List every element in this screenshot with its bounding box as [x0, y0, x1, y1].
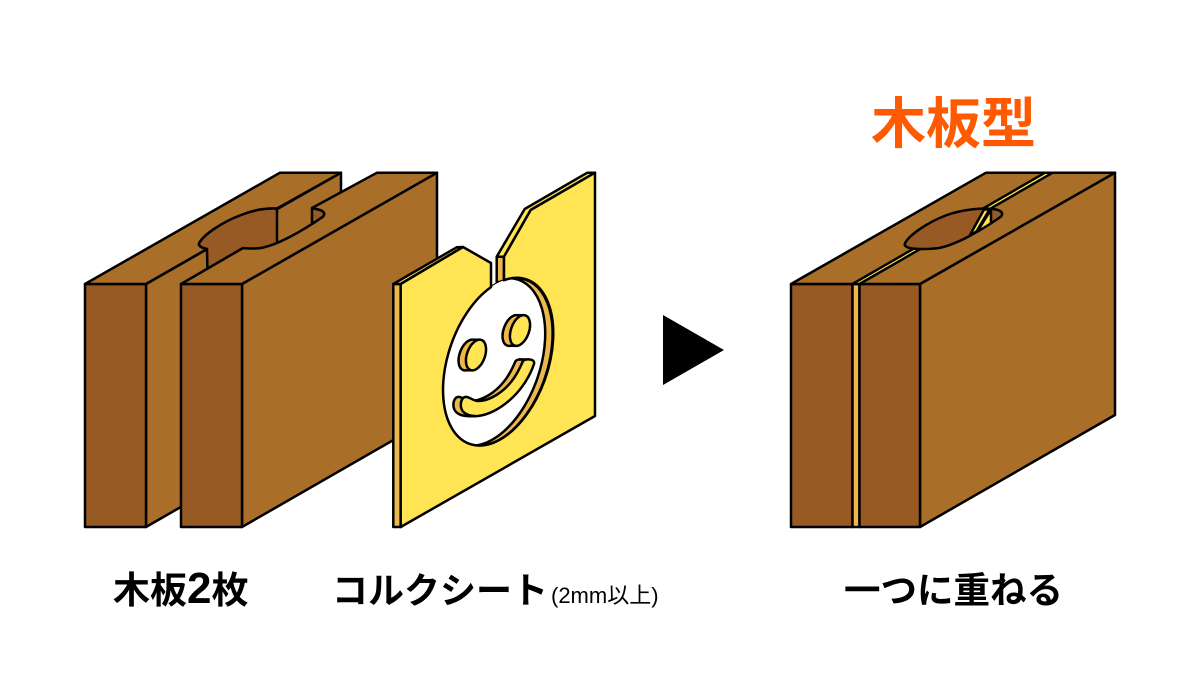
label: cork sheet	[332, 570, 659, 611]
title: 木板型	[871, 93, 1036, 155]
top cork line	[852, 173, 1053, 284]
right eye	[499, 312, 534, 349]
smile	[453, 359, 534, 416]
sheet front face	[401, 173, 595, 527]
front cork strip	[852, 284, 860, 527]
cork sheet with smiley cut-out	[393, 173, 595, 527]
face hole	[476, 279, 552, 444]
label: cork sheet: (2mm以上)	[551, 583, 659, 608]
right illustration: boards stacked with cork between	[791, 173, 1115, 527]
label: stack together: 一つに重ねる	[844, 570, 1063, 611]
left eye	[455, 337, 490, 373]
arrow	[663, 315, 724, 385]
hole	[905, 209, 1002, 249]
sheet edges	[393, 173, 595, 527]
front right board	[860, 284, 920, 527]
board 1	[85, 173, 341, 527]
front left board	[791, 284, 852, 527]
top face	[791, 173, 1115, 284]
side face	[920, 173, 1115, 527]
label: two boards: 木板2枚	[113, 564, 248, 613]
label: cork sheet: コルクシート	[332, 570, 548, 611]
left illustration: two wooden boards	[85, 173, 437, 527]
board 2	[181, 173, 437, 527]
